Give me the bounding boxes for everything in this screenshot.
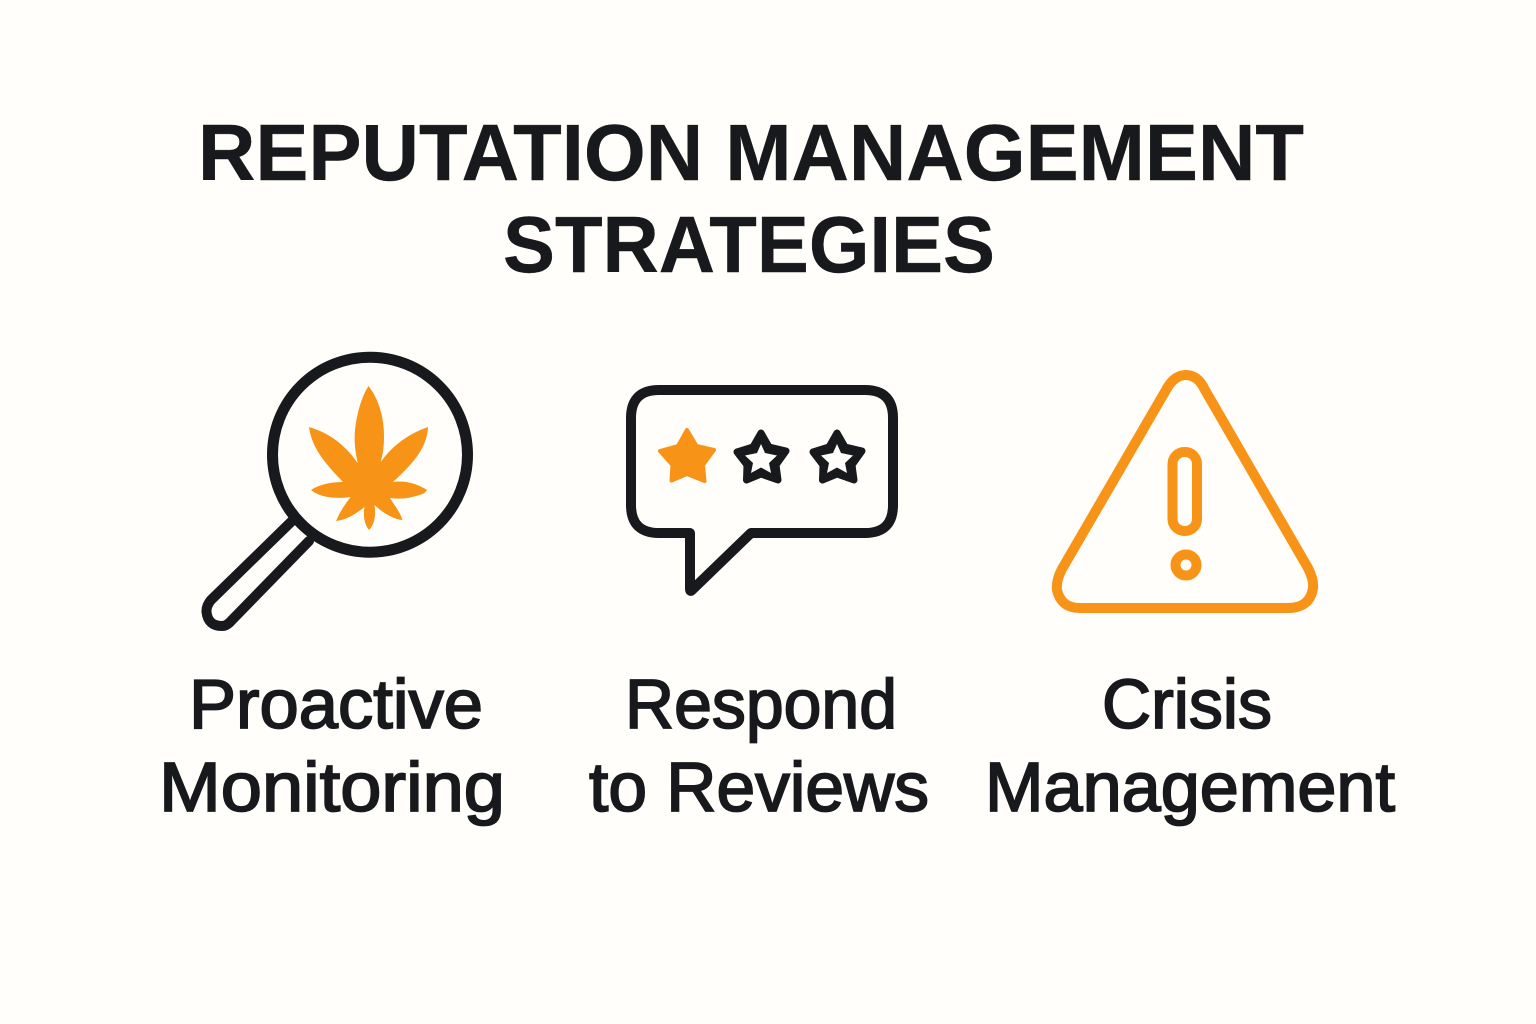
label: crisis management: Management bbox=[985, 748, 1395, 826]
icon: warning triangle bbox=[1057, 375, 1313, 608]
icon: speech bubble with stars bbox=[631, 390, 893, 591]
label: crisis management: Crisis bbox=[1102, 665, 1272, 743]
label: proactive monitoring bbox=[159, 665, 505, 826]
label: proactive monitoring: Monitoring bbox=[159, 748, 505, 826]
label: proactive monitoring: Proactive bbox=[189, 665, 483, 743]
icon: magnifying glass with leaf bbox=[206, 357, 468, 626]
title bbox=[198, 108, 1304, 289]
label: crisis management bbox=[985, 665, 1395, 826]
label: respond to reviews bbox=[589, 665, 929, 826]
title: REPUTATION MANAGEMENT bbox=[198, 108, 1304, 197]
icon: filled orange star bbox=[660, 430, 714, 481]
label: respond to reviews: Respond bbox=[625, 665, 897, 743]
icon: outline star 3 bbox=[813, 433, 862, 480]
label: respond to reviews: to Reviews bbox=[589, 748, 929, 826]
icon: outline star 2 bbox=[737, 433, 786, 480]
title: STRATEGIES bbox=[503, 200, 995, 289]
icon: orange leaf bbox=[309, 386, 428, 530]
